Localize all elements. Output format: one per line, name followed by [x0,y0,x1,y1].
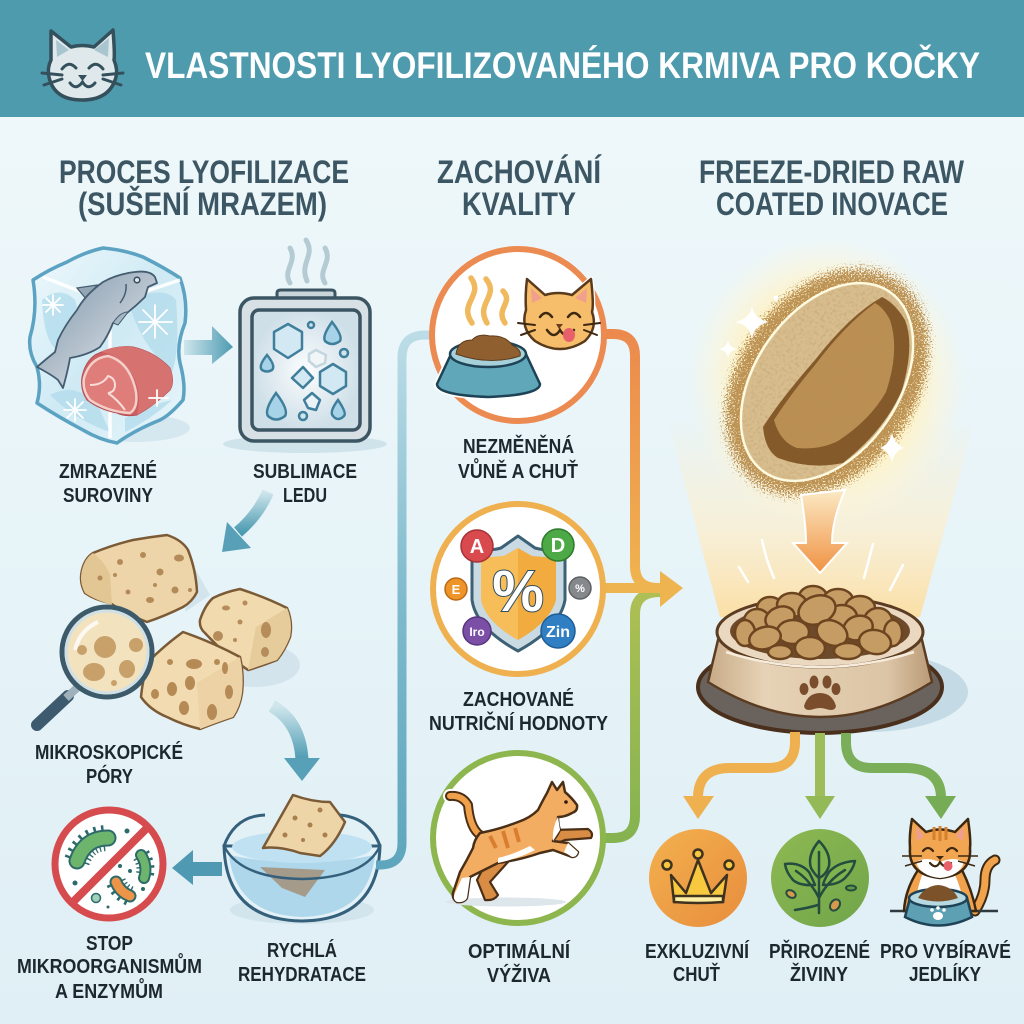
icon: sponge rehydrating in water bowl [224,795,380,924]
label: exclusive taste: EXKLUZIVNÍ [645,940,749,963]
icon: vitamin badges: E [452,582,461,597]
label: exclusive taste: CHUŤ [673,962,720,986]
label: optimal nutrition [468,940,570,987]
label: rapid rehydration: REHYDRATACE [238,964,366,986]
label: unchanged scent and taste: VŮNĚ A CHUŤ [458,457,578,483]
arrow: to stop microorganisms [172,850,222,885]
arrow: to rehydration [272,706,320,781]
panel: optimal nutrition [433,753,603,923]
label: microscopic pores: PÓRY [86,764,134,788]
magnifier [37,607,152,725]
label: unchanged scent and taste: NEZMĚNĚNÁ [463,434,574,458]
icon: porous sponge pieces with magnifier [37,535,300,729]
label: frozen ingredients [59,460,157,507]
label: natural nutrients: ŽIVINY [790,962,849,986]
arrow: bowl to exclusive taste [683,732,795,819]
glow around kibble [687,237,967,527]
label: stop microorganisms: MIKROORGANISMŮM [17,952,202,978]
connector: optimal nutrition to bowl [604,592,660,838]
label: preserved nutrition: ZACHOVANÉ [463,688,574,711]
body [453,782,578,902]
heading: innovation: COATED INOVACE [716,186,948,222]
header band [0,0,1024,117]
icon: shield with percent: % [492,559,544,624]
icon: paw print [800,676,840,710]
arrow: bowl to picky eaters [846,733,956,819]
label: frozen ingredients: ZMRAZENÉ [59,460,157,483]
label: natural nutrients: PŘIROZENÉ [769,939,870,963]
crumb dust halo [662,207,992,557]
large piece [81,535,197,622]
panel: unchanged scent and taste [432,249,604,421]
label: ice sublimation: LEDU [283,485,327,507]
label: microscopic pores [35,741,183,788]
label: optimal nutrition: VÝŽIVA [487,963,551,987]
icon: vitamin badges: Zin [546,624,570,641]
icon: freeze dryer chamber with ice and drops [223,240,387,453]
fish [37,272,157,388]
label: preserved nutrition: NUTRIČNÍ HODNOTY [429,711,609,735]
icon: vitamin badges: % [575,583,585,595]
icon: vitamin badges [445,529,591,648]
icon: raw coated kibble [662,207,992,557]
icon: microorganisms prohibited [55,810,163,918]
connector: rehydration to quality [376,335,432,865]
icon: vitamin badges: D [551,535,565,557]
sparkles [719,296,904,463]
label: microscopic pores: MIKROSKOPICKÉ [35,741,183,764]
icon: vitamin badges: A [470,536,484,558]
meat [82,347,172,416]
label: picky eaters: JEDLÍKY [909,963,982,986]
panel: preserved nutrition [433,504,603,674]
label: rapid rehydration: RYCHLÁ [267,939,337,962]
label: stop microorganisms: A ENZYMŮM [55,977,163,1003]
heading: innovation: FREEZE-DRIED RAW [699,154,965,190]
label: ice sublimation [253,461,357,507]
front piece [141,632,243,729]
icon: food bowl [437,335,540,397]
green bacterium [77,838,145,896]
connector: scent to bowl [604,334,658,588]
light cone [667,417,973,617]
label: ice sublimation: SUBLIMACE [253,461,357,483]
far legs [477,829,592,900]
heading: process [59,154,349,222]
arrow: bowl to natural nutrients [805,733,835,819]
heading: process: (SUŠENÍ MRAZEM) [78,186,327,222]
right piece [200,589,291,670]
heading: quality: KVALITY [462,186,576,222]
icon: licking cat [518,279,600,349]
arrow: to sublimation [184,326,233,364]
heading: quality: ZACHOVÁNÍ [437,154,602,190]
icon: cat eating from bowl [890,819,998,926]
icon: running cat [450,782,592,902]
label: stop microorganisms: STOP [86,933,133,955]
icon: bowl of kibble [698,586,968,733]
label: natural nutrients [769,939,870,986]
label: stop microorganisms [17,933,202,1003]
heading: process: PROCES LYOFILIZACE [59,154,349,190]
kibble pile [735,586,902,659]
label: frozen ingredients: SUROVINY [63,485,154,507]
icon: plant badge [771,829,869,927]
heading: quality [437,154,602,222]
label: picky eaters [880,940,1011,986]
icon: frozen fish and meat in ice cube [30,248,190,443]
icon: shield with percent [472,536,565,651]
connector arrow: nutrition to bowl [604,571,683,607]
heading: innovation [699,154,965,222]
arrow: kibble down to bowl [739,490,903,590]
arrow: to porous pieces [222,492,268,552]
icon: crown badge [649,829,747,927]
label: unchanged scent and taste [458,434,578,483]
label: preserved nutrition [429,688,609,735]
label: optimal nutrition: OPTIMÁLNÍ [468,940,570,963]
label: rapid rehydration [238,939,366,986]
icon: steam [468,278,507,323]
label: exclusive taste [645,940,749,986]
icon: smiling cat head [42,30,123,100]
icon: vitamin badges: Iro [469,625,485,639]
